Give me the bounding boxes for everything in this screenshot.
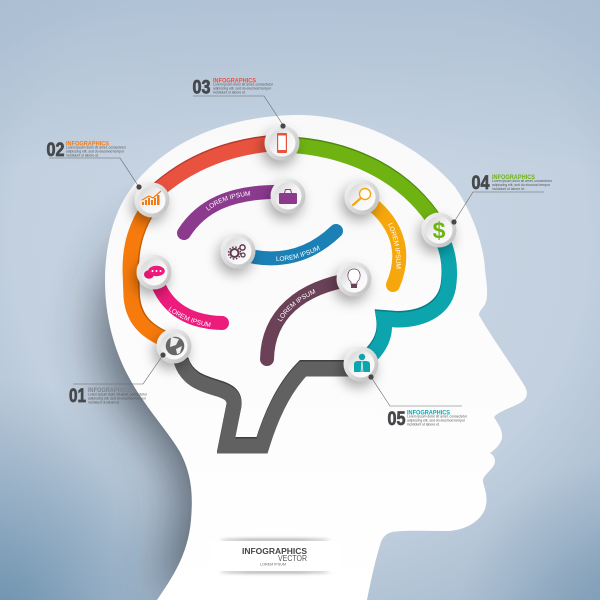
hub: dollar: $ <box>433 218 446 244</box>
callout 01: 01 <box>69 386 86 407</box>
callout 05: INFOGRAPHICS <box>407 410 451 416</box>
callout 03: incididunt ut labore et. <box>213 90 246 94</box>
callout 04: Lorem ipsum dolor sit amet, consectetur <box>492 179 553 183</box>
track: purple <box>184 192 288 233</box>
callout 03 <box>192 78 286 129</box>
track: red segment <box>152 142 282 196</box>
footer title block: INFOGRAPHICS <box>242 546 307 556</box>
callout 05: incididunt ut labore et. <box>407 422 440 426</box>
hub: bar chart <box>134 182 170 218</box>
callout 02: 02 <box>46 140 64 161</box>
callout 02: adipiscing elit, sed do eiusmod tempor <box>66 150 125 154</box>
track: orange segment <box>130 204 170 341</box>
callout 01: incididunt ut labore et. <box>88 400 120 404</box>
callout 02: Lorem ipsum dolor sit amet, consectetur <box>66 146 127 150</box>
hub: person <box>344 346 378 382</box>
label: yellow track: LOREM IPSUM <box>388 222 401 268</box>
label: maroon track: LOREM IPSUM <box>278 289 316 322</box>
track: blue <box>238 231 336 258</box>
callout 02: INFOGRAPHICS <box>66 140 110 148</box>
callout 04: incididunt ut labore et. <box>492 187 525 191</box>
track: maroon <box>267 279 354 359</box>
track: gray segment <box>181 360 361 446</box>
hub: chat <box>136 254 172 290</box>
brain outline tracks <box>130 142 450 446</box>
callout 04 <box>451 173 553 225</box>
head shadow <box>101 230 300 600</box>
callout 01: adipiscing elit, sed do eiusmod tempor <box>88 396 147 400</box>
callout 01: Lorem ipsum dolor sit amet, consectetur <box>88 392 148 396</box>
footer title block: LOREM IPSUM <box>260 562 286 566</box>
label: blue track: LOREM IPSUM <box>276 246 320 261</box>
callout 03: Lorem ipsum dolor sit amet, consectetur <box>213 82 274 86</box>
callout 04: adipiscing elit, sed do eiusmod tempor <box>492 183 551 187</box>
callout 04: 04 <box>472 173 490 194</box>
footer title block <box>210 539 340 573</box>
track: teal segment <box>360 230 450 364</box>
track: yellow <box>362 197 399 285</box>
label: purple track: LOREM IPSUM <box>206 191 250 211</box>
callout 05: adipiscing elit, sed do eiusmod tempor <box>407 418 466 422</box>
label: pink track: LOREM IPSUM <box>168 306 211 327</box>
inner tracks <box>154 192 399 359</box>
footer title block: VECTOR <box>278 554 307 563</box>
callout 03: 03 <box>192 78 210 98</box>
callout 05: Lorem ipsum dolor sit amet, consectetur <box>407 414 468 418</box>
hub: gears <box>220 234 256 268</box>
callout 01: INFOGRAPHICS <box>88 387 132 394</box>
hub: magnifier <box>344 180 380 214</box>
callout 05: 05 <box>388 409 406 430</box>
track: pink <box>154 272 222 323</box>
callout 05 <box>368 374 468 430</box>
hub: light bulb <box>336 262 372 296</box>
hub: dollar <box>422 212 456 248</box>
hub: globe <box>156 328 192 364</box>
callout 02 <box>46 140 142 190</box>
track: green segment <box>282 144 439 228</box>
callout 02: incididunt ut labore et. <box>66 154 99 158</box>
callout 03: INFOGRAPHICS <box>213 78 257 84</box>
callout 01 <box>69 352 166 407</box>
hub: phone <box>264 126 300 160</box>
hub: briefcase <box>270 178 306 214</box>
callout 03: adipiscing elit, sed do eiusmod tempor <box>213 86 272 90</box>
head silhouette <box>105 115 527 600</box>
callout 04: INFOGRAPHICS <box>492 174 536 181</box>
